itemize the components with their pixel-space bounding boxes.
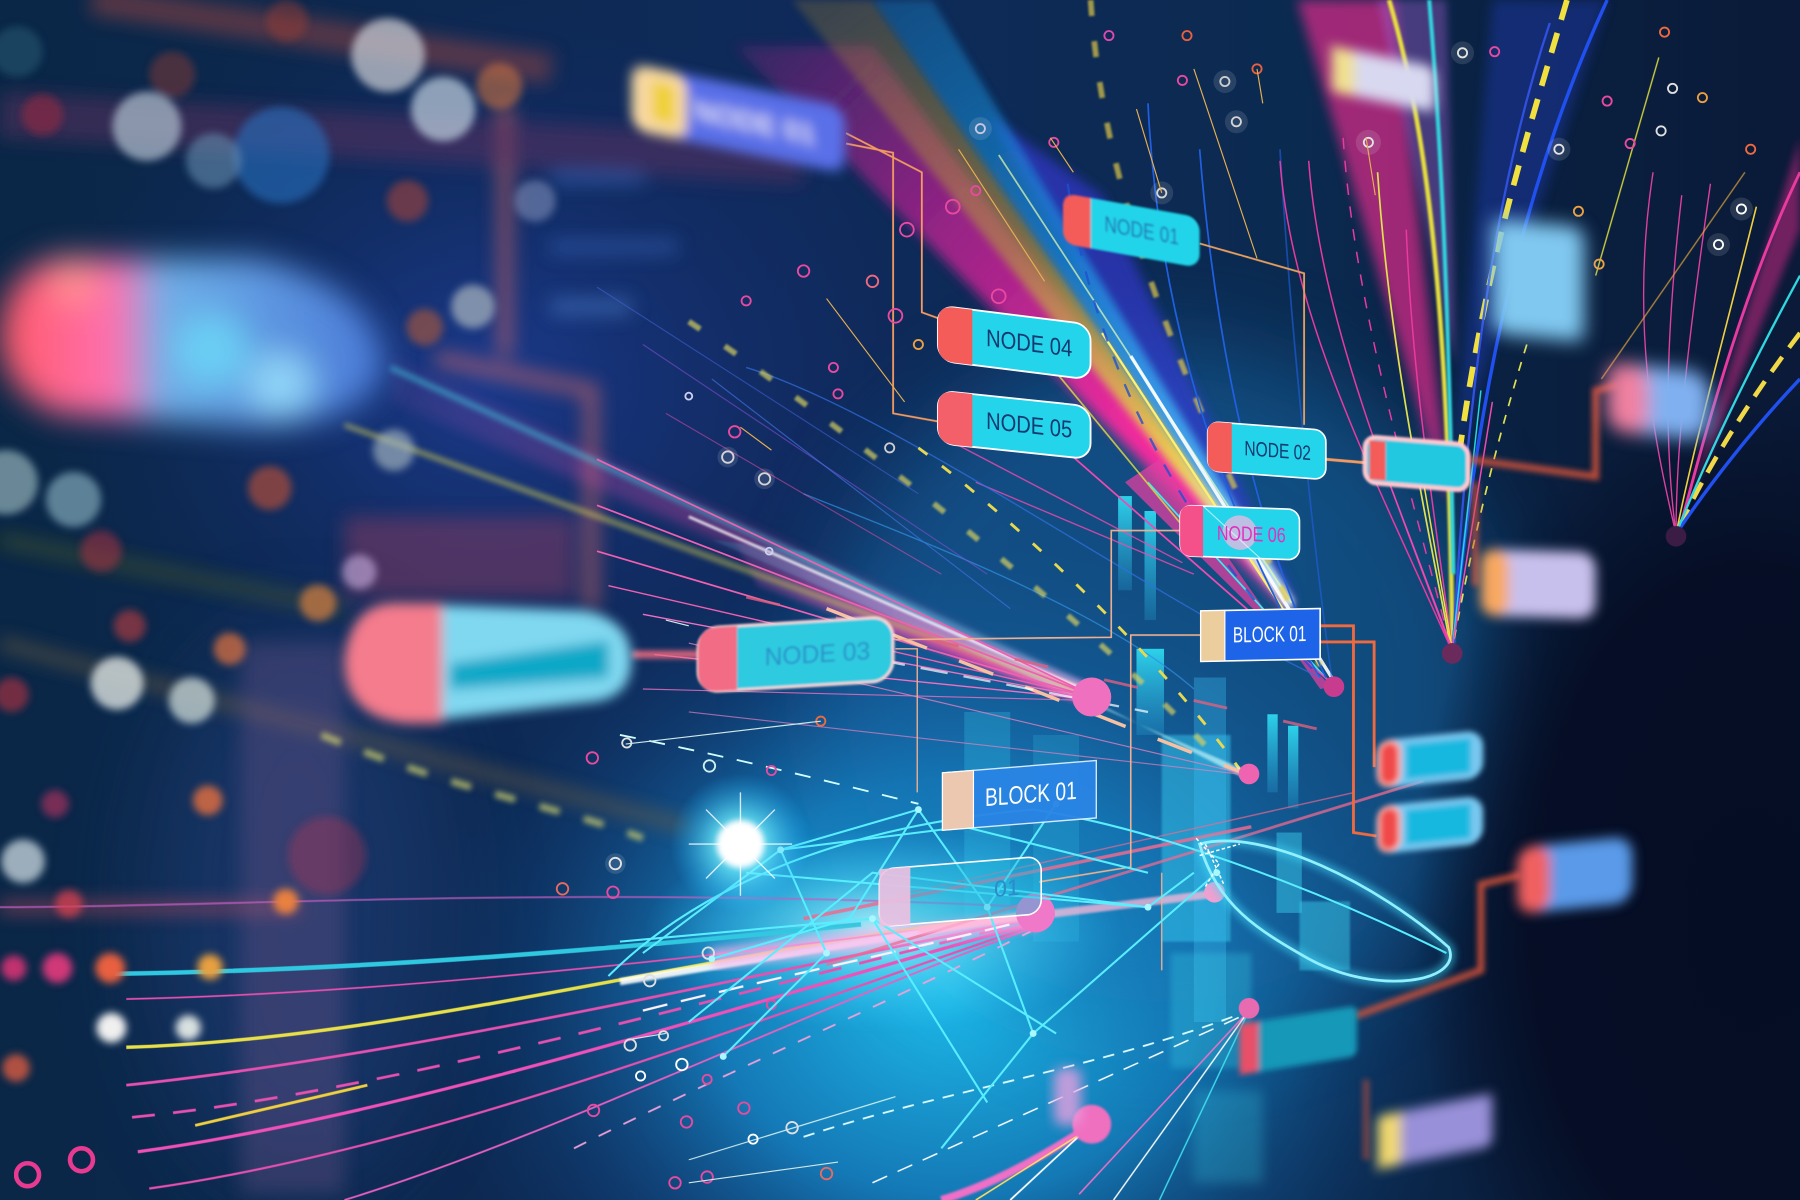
node 06	[1180, 505, 1299, 560]
small thin sticks with dots	[626, 69, 1375, 1183]
pill: red cyan upper	[1376, 730, 1483, 789]
block 01 lower: BLOCK 01	[985, 777, 1077, 812]
node 05: NODE 05	[986, 408, 1072, 444]
large blurred node: top-left: NODE 01	[695, 95, 815, 150]
node 06: NODE 06	[1217, 522, 1286, 547]
node 02	[1208, 421, 1326, 480]
block 01 lower	[942, 761, 1096, 830]
top light beams converging on node 06	[597, 0, 1332, 769]
faint lower node	[879, 856, 1041, 927]
blurred left background network	[0, 0, 804, 1194]
large blurred pill: left top	[0, 256, 385, 427]
pink connector dots	[1016, 676, 1344, 932]
pill: yellow lavender lower	[1378, 1093, 1492, 1169]
top-right colored line fan	[1280, 0, 1607, 664]
pill: top-right yellow	[1332, 46, 1435, 113]
node 02: NODE 02	[1244, 437, 1311, 465]
far-right colored line fan	[1596, 57, 1800, 547]
pill: red blue lower	[1518, 836, 1632, 914]
star flare	[669, 773, 812, 915]
pill: light blue column	[1492, 218, 1584, 342]
block 01 upper: BLOCK 01	[1233, 621, 1306, 647]
node 03	[698, 616, 893, 692]
node 04	[938, 305, 1091, 380]
scattered ring dots	[557, 28, 1755, 1189]
left light beams converging on pink node	[321, 356, 1343, 838]
blurred right nodes	[1054, 46, 1710, 1169]
pill: faint lower pink	[1054, 1068, 1081, 1125]
bottom fans	[689, 998, 1259, 1200]
node 05	[938, 390, 1091, 459]
translucent chart bars	[964, 496, 1350, 1183]
pill: red cyan lower	[1376, 795, 1483, 854]
thin orange connector lines	[846, 133, 1376, 970]
mesh nodes	[708, 800, 1220, 1060]
bright mesh network lines	[608, 804, 1446, 1148]
glowing ring ellipse	[1196, 838, 1450, 981]
node 03: NODE 03	[765, 637, 870, 671]
pill: small node at right of node 02	[1365, 436, 1468, 491]
block 01 upper	[1201, 609, 1320, 661]
pill: pink blue	[1607, 362, 1710, 441]
node 01	[1063, 193, 1200, 268]
pill: orange lavender	[1481, 549, 1596, 619]
node 04: NODE 04	[986, 325, 1072, 363]
bottom-left curved streams	[0, 781, 1423, 1200]
large blurred pill: left mid	[344, 603, 631, 723]
glow halos around rings	[605, 41, 1753, 874]
faint lower node: 01	[994, 874, 1020, 902]
node 01: NODE 01	[1104, 212, 1179, 250]
large blurred node: top-left	[631, 63, 845, 174]
pill: teal red lower	[1240, 1006, 1357, 1075]
blurred red connectors on right	[631, 385, 1619, 1160]
blurred large pale circles on the left	[0, 0, 556, 1082]
bottom-left crisp rings	[16, 1148, 93, 1186]
